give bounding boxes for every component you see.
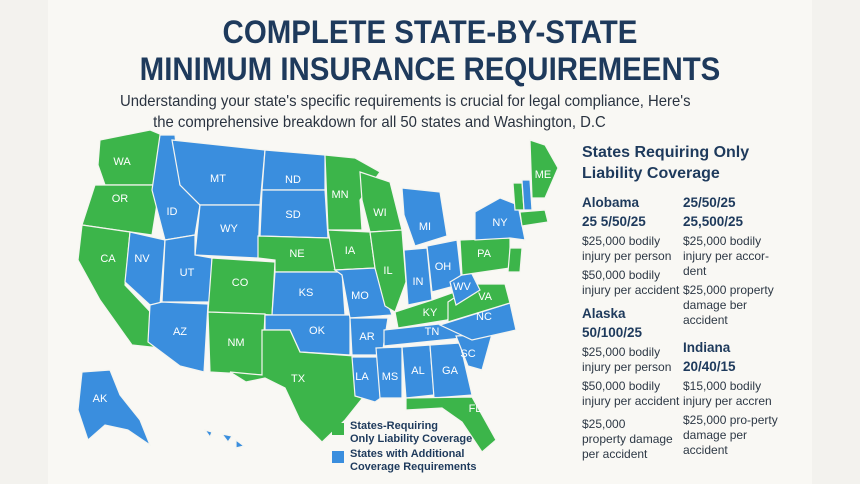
column 2 bbox=[683, 195, 778, 457]
map: GA bbox=[442, 365, 459, 377]
map: MT bbox=[210, 173, 226, 185]
map: OR bbox=[112, 193, 128, 205]
map: WI bbox=[373, 207, 387, 219]
column 2: $15,000 bodily injury per accren bbox=[683, 379, 772, 408]
map: NM bbox=[227, 337, 245, 349]
map: AL bbox=[411, 365, 425, 377]
map: WY bbox=[220, 223, 239, 235]
map: LA bbox=[355, 371, 369, 383]
legend: Only Liability Coverage bbox=[350, 432, 472, 444]
column 1: $50,000 bodily injury per accident bbox=[582, 379, 679, 408]
map: AK bbox=[93, 393, 108, 405]
map: ME bbox=[535, 169, 551, 181]
subtitle: Understanding your state's specific requirements is crucial for legal compliance, Here's bbox=[120, 93, 691, 110]
side panel bbox=[582, 144, 749, 182]
map: IN bbox=[412, 276, 424, 288]
column 1: property damage per accident bbox=[582, 432, 673, 461]
map: SC bbox=[460, 348, 476, 360]
map: NV bbox=[134, 253, 150, 265]
map: WV bbox=[453, 281, 472, 293]
subtitle: the comprehensive breakdown for all 50 states and Washington, D.C bbox=[153, 114, 606, 131]
column 1: 25 5/50/25 bbox=[582, 214, 646, 229]
map: CA bbox=[100, 253, 116, 265]
column 1: $25,000 bbox=[582, 417, 625, 431]
map: ND bbox=[285, 174, 301, 186]
map: FL bbox=[469, 403, 481, 415]
column 2: 20/40/15 bbox=[683, 359, 736, 374]
map: WA bbox=[113, 156, 131, 168]
legend: Coverage Requirements bbox=[350, 460, 477, 472]
map: NY bbox=[492, 217, 508, 229]
legend bbox=[332, 420, 477, 472]
map: IL bbox=[383, 265, 393, 277]
map: UT bbox=[180, 267, 195, 279]
map: AZ bbox=[173, 326, 187, 338]
map: TX bbox=[291, 373, 306, 385]
column 2: $25,000 pro-perty damage per accident bbox=[683, 413, 778, 457]
map: PA bbox=[477, 248, 492, 260]
map: KY bbox=[423, 307, 438, 319]
column 1: Alaska bbox=[582, 306, 626, 321]
map: OH bbox=[435, 261, 451, 273]
map: MO bbox=[351, 290, 369, 302]
legend: States-Requiring bbox=[350, 420, 438, 432]
map: ID bbox=[166, 206, 178, 218]
title bbox=[140, 14, 720, 87]
map: MN bbox=[331, 189, 349, 201]
map: OK bbox=[309, 325, 326, 337]
map: MI bbox=[419, 221, 431, 233]
map: KS bbox=[299, 287, 313, 299]
map: NE bbox=[289, 248, 305, 260]
column 2: 25/50/25 bbox=[683, 195, 736, 210]
subtitle bbox=[120, 93, 691, 131]
column 1: $50,000 bodily injury per accident bbox=[582, 268, 679, 297]
map: CO bbox=[232, 277, 249, 289]
column 1: $25,000 bodily injury per person bbox=[582, 345, 671, 374]
map: AR bbox=[359, 331, 375, 343]
title: COMPLETE STATE-BY-STATE bbox=[223, 14, 637, 50]
column 2: $25,000 bodily injury per accor-dent bbox=[683, 234, 769, 278]
column 1: $25,000 bodily injury per person bbox=[582, 234, 671, 263]
side panel: Liability Coverage bbox=[582, 165, 720, 182]
column 2: $25,000 property damage ber accident bbox=[683, 283, 774, 327]
map: VA bbox=[478, 291, 493, 303]
column 2: 25,500/25 bbox=[683, 214, 743, 229]
side panel: States Requiring Only bbox=[582, 144, 749, 161]
legend: States with Additional bbox=[350, 448, 464, 460]
title: MINIMUM INSURANCE REQUIREMEENTS bbox=[140, 51, 720, 87]
column 1: 50/100/25 bbox=[582, 325, 642, 340]
column 1: Alobama bbox=[582, 195, 639, 210]
map: TN bbox=[425, 326, 439, 338]
map: NC bbox=[476, 311, 492, 323]
map: IA bbox=[345, 245, 356, 257]
map: MS bbox=[382, 371, 398, 383]
column 1 bbox=[582, 195, 680, 461]
column 2: Indiana bbox=[683, 340, 730, 355]
map: SD bbox=[285, 209, 301, 221]
